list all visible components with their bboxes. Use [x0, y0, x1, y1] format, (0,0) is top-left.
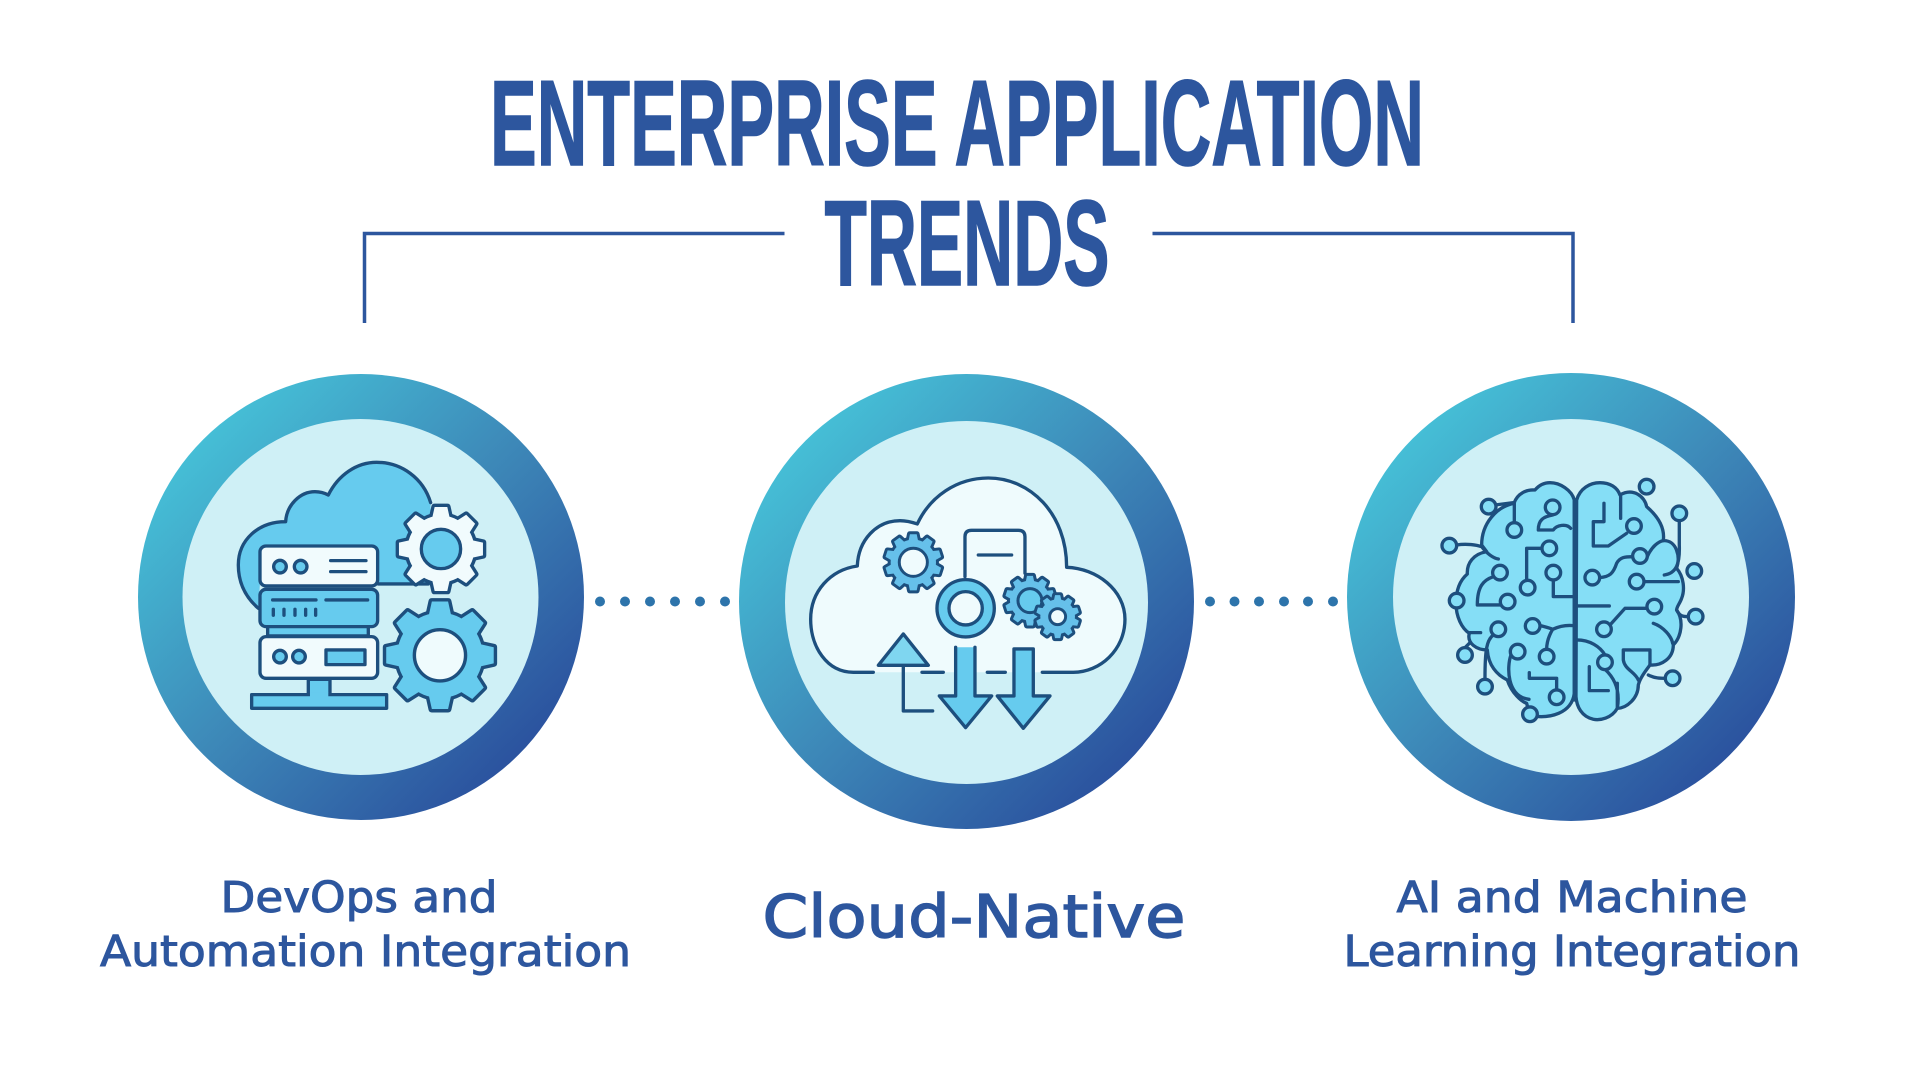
panel: DevOps circle — [138, 374, 584, 820]
connector dots right — [1205, 596, 1338, 606]
cloud — [238, 462, 431, 608]
icon: cloud servers and gears — [238, 462, 494, 709]
title line 2: TRENDS — [824, 175, 1110, 311]
gear right small — [1036, 595, 1079, 638]
gear bottom — [386, 602, 494, 709]
label: Cloud-Native: Cloud-Native — [762, 882, 1186, 951]
circuit nodes — [1442, 479, 1703, 722]
server stack — [252, 546, 387, 708]
label: AI and Machine Learning: AI and Machine — [1396, 874, 1748, 923]
label: DevOps — [100, 874, 631, 977]
arrow down 1 — [939, 647, 992, 728]
arrow down 2 — [997, 649, 1050, 728]
label: AI and Machine Learning — [1344, 874, 1800, 977]
gear left — [885, 534, 942, 590]
label: DevOps: DevOps and — [220, 874, 498, 923]
cloud outline — [811, 478, 1125, 672]
icon: cloud with gears and arrows — [811, 478, 1125, 728]
title — [490, 55, 1424, 311]
brain left hemisphere — [1456, 483, 1574, 717]
gear top — [399, 507, 483, 591]
inner disc — [1393, 419, 1749, 775]
panel: AI circle — [1347, 373, 1795, 821]
label: AI and Machine Learning: Learning Integration — [1344, 928, 1800, 977]
inner disc — [182, 419, 538, 775]
outer gradient ring — [1347, 373, 1795, 821]
arrow up — [878, 634, 933, 711]
outer gradient ring — [138, 374, 584, 820]
inner disc — [785, 421, 1148, 784]
connector dots left — [595, 596, 730, 606]
document — [965, 530, 1025, 577]
outer gradient ring — [739, 374, 1194, 829]
label: DevOps: Automation Integration — [100, 928, 631, 977]
icon: circuit brain — [1442, 479, 1703, 722]
brain right hemisphere — [1576, 483, 1683, 720]
central ring — [937, 580, 994, 637]
panel: Cloud-Native circle — [739, 374, 1194, 829]
gear right large — [1005, 576, 1055, 625]
circuit traces — [1457, 497, 1688, 708]
bracket connector — [364, 234, 1573, 323]
